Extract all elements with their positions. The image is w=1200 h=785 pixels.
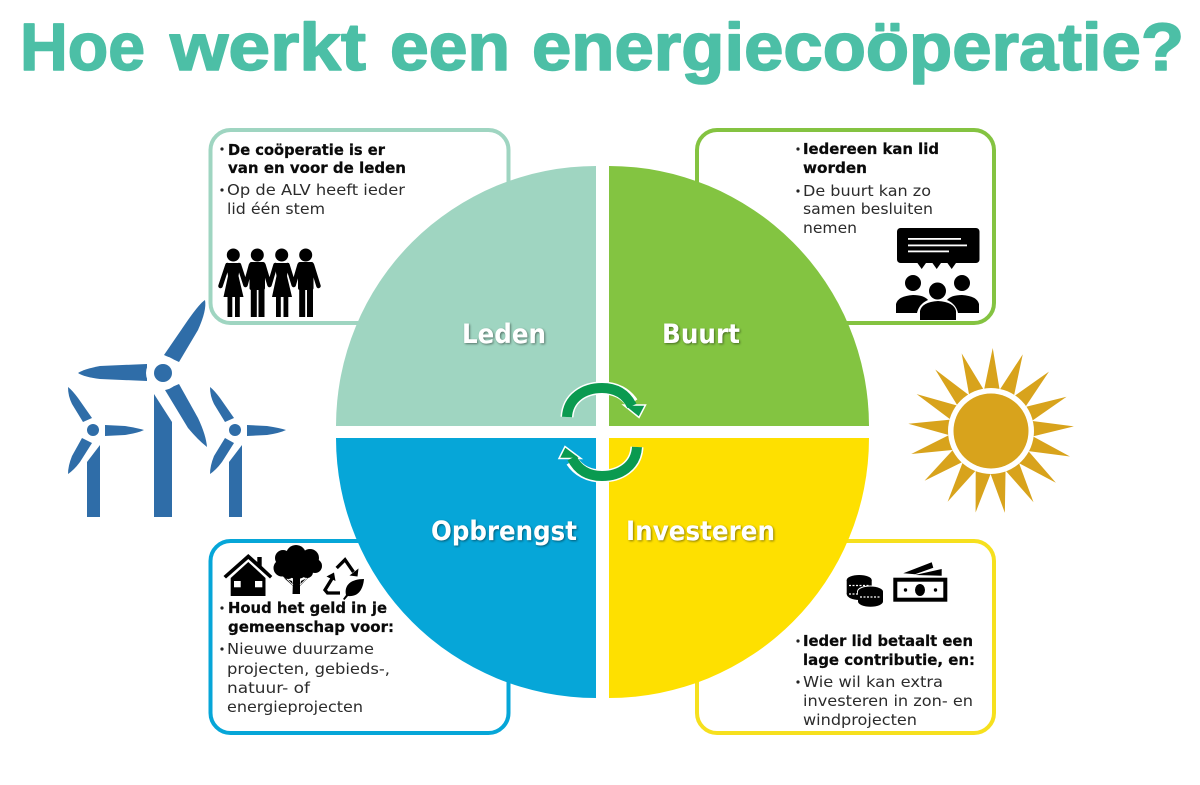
turbine: left	[68, 387, 144, 517]
text: investeren: lage contributie, en:	[803, 651, 975, 669]
text: leden: De coöperatie is er	[228, 141, 385, 159]
title: energiecoöperatie?	[532, 10, 1184, 85]
label: opbrengst: Opbrengst	[431, 516, 577, 547]
text: investeren: investeren in zon- en	[803, 692, 973, 710]
text: opbrengst: Nieuwe duurzame	[227, 640, 374, 658]
text: investeren: Wie wil kan extra	[803, 673, 943, 691]
text: opbrengst: projecten, gebieds-,	[227, 660, 390, 678]
panel: investeren	[697, 541, 994, 733]
arrow: clockwise top	[567, 388, 646, 418]
text: opbrengst: natuur- of	[227, 679, 311, 697]
text: opbrengst	[220, 599, 394, 716]
label: buurt: Buurt	[662, 319, 740, 350]
text: buurt	[796, 140, 939, 237]
turbine: large	[78, 300, 207, 517]
title: werkt	[169, 10, 366, 85]
icon: banknotes	[895, 562, 945, 600]
quadrant: buurt	[609, 166, 869, 426]
text: buurt: samen besluiten	[803, 200, 933, 218]
title: Hoe	[20, 10, 145, 85]
quadrant: leden	[336, 166, 596, 426]
panel: opbrengst	[210, 541, 508, 733]
text: investeren	[796, 632, 975, 729]
text: buurt: De buurt kan zo	[803, 182, 931, 200]
panel: leden	[210, 130, 508, 323]
icon: coins	[847, 575, 884, 607]
icon: speech bubble with group	[896, 228, 980, 320]
icon: wind turbines	[68, 300, 286, 517]
text: leden: lid één stem	[227, 200, 325, 218]
icon: recycling with leaf	[325, 560, 364, 600]
text: opbrengst: Houd het geld in je	[228, 599, 387, 617]
panel: buurt	[697, 130, 994, 323]
icon: sun	[908, 348, 1074, 514]
text: buurt: nemen	[803, 219, 857, 237]
text: buurt: worden	[803, 159, 867, 177]
label: investeren: Investeren	[626, 516, 775, 547]
quadrant: opbrengst	[336, 438, 596, 698]
text: investeren: windprojecten	[803, 711, 917, 729]
label: leden: Leden	[462, 319, 546, 350]
title: een	[390, 10, 510, 85]
text: buurt: Iedereen kan lid	[803, 140, 939, 158]
text: investeren: Ieder lid betaalt een	[803, 632, 973, 650]
text: leden: Op de ALV heeft ieder	[227, 181, 406, 199]
text: leden: van en voor de leden	[228, 159, 406, 177]
text: opbrengst: energieprojecten	[227, 698, 363, 716]
quadrant: investeren	[609, 438, 869, 698]
icon: tree	[274, 545, 322, 594]
title	[20, 10, 1184, 85]
icon: house	[224, 554, 272, 596]
icon: four people	[220, 248, 318, 317]
text: opbrengst: gemeenschap voor:	[228, 618, 394, 636]
text: leden	[220, 141, 406, 218]
turbine: right	[210, 387, 286, 517]
arrow: clockwise bottom	[559, 446, 637, 476]
